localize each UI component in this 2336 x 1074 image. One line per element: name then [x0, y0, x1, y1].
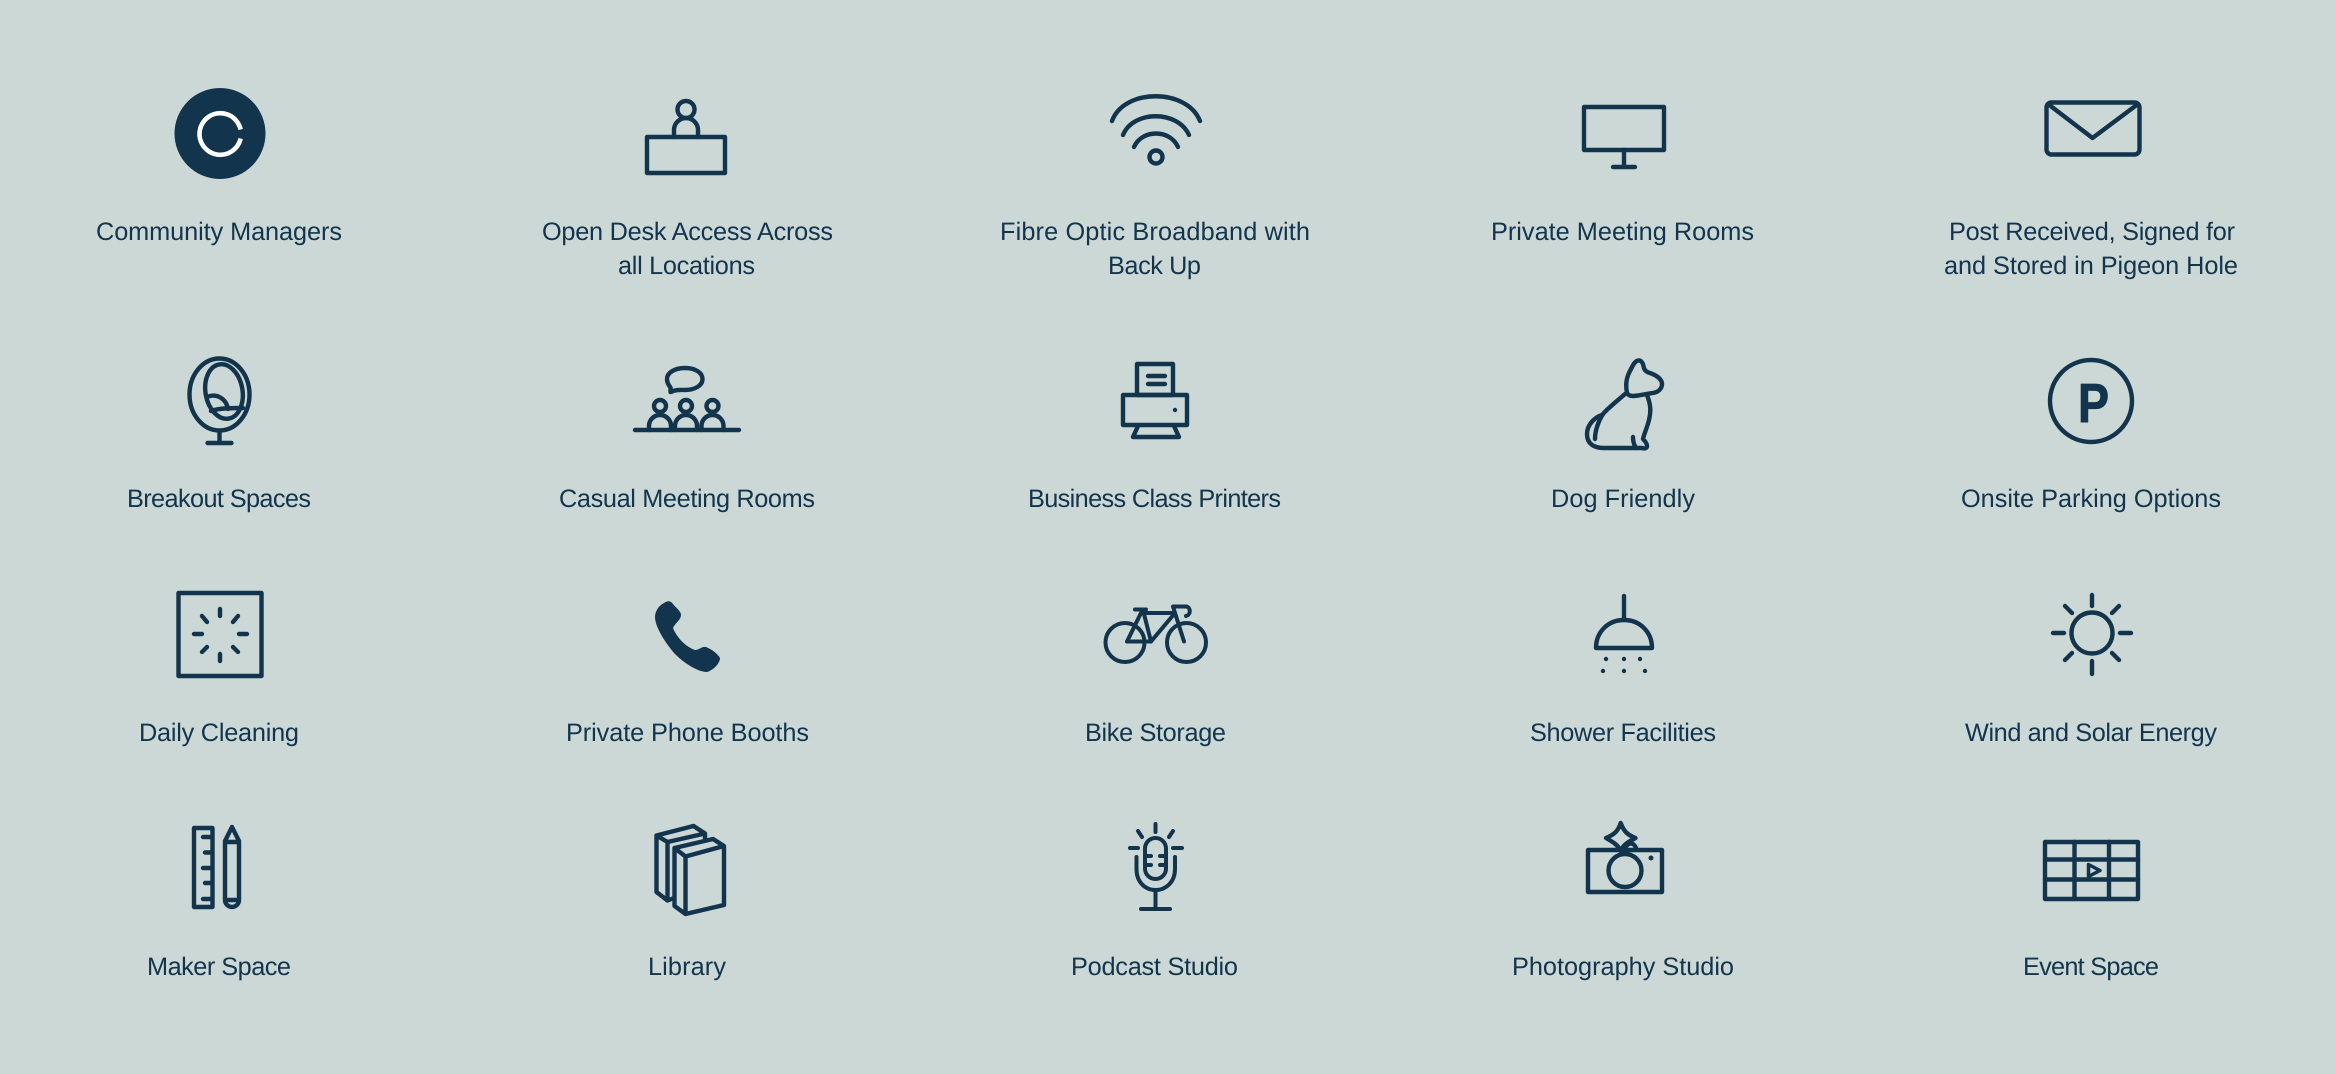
- label: Private Phone Booths: Private Phone Booths: [566, 719, 809, 747]
- icon: screen grid with play button: [2045, 842, 2138, 899]
- item: Private Phone Booths: [566, 601, 809, 747]
- icon: envelope: [2046, 102, 2140, 154]
- label: Post Received: and Stored in Pigeon Hole: [1944, 252, 2238, 280]
- label: Private Meeting Rooms: Private Meeting Rooms: [1491, 218, 1754, 246]
- icon: monitor: [1584, 107, 1664, 167]
- icon: bicycle: [1106, 606, 1206, 662]
- item: Maker Space: [147, 827, 291, 981]
- icon: shower head: [1596, 596, 1652, 648]
- icon: microphone: [1130, 824, 1182, 909]
- label: Daily Cleaning: Daily Cleaning: [139, 719, 299, 747]
- icon: wifi: [1112, 96, 1200, 164]
- item: Community Managers: [96, 88, 342, 246]
- icon: books: [656, 826, 724, 914]
- label: Fibre Optic Broadband: [1000, 218, 1310, 280]
- label: Post Received: [1944, 218, 2238, 280]
- label: Post Received: Post Received, Signed for: [1949, 218, 2235, 246]
- icon: egg chair: [190, 358, 250, 443]
- icon: printer: [1123, 364, 1187, 437]
- icon: community logo: [174, 88, 266, 179]
- icon: parking sign: [2050, 360, 2132, 442]
- item: Podcast Studio: [1071, 824, 1238, 981]
- item: Breakout Spaces: [127, 358, 311, 513]
- label: Wind and Solar Energy: Wind and Solar Energy: [1965, 719, 2217, 747]
- item: Fibre Optic Broadband: [1000, 96, 1310, 280]
- item: Casual Meeting Rooms: [559, 368, 815, 513]
- label: Maker Space: Maker Space: [147, 953, 291, 981]
- item: Onsite Parking Options: [1961, 360, 2221, 513]
- label: Open Desk Access: Open Desk Access Across: [542, 218, 833, 246]
- icon: group with speech bubble: [635, 368, 739, 430]
- item: Business Class Printers: [1028, 364, 1281, 513]
- label: Business Class Printers: Business Class Printers: [1028, 485, 1281, 513]
- item: Private Meeting Rooms: [1491, 107, 1754, 246]
- icon: sun: [2053, 595, 2131, 674]
- label: Community Managers: Community Managers: [96, 218, 342, 246]
- label: Casual Meeting Rooms: Casual Meeting Rooms: [559, 485, 815, 513]
- label: Fibre Optic Broadband: Back Up: [1108, 252, 1201, 280]
- item: Event Space: [2023, 842, 2159, 981]
- label: Photography Studio: Photography Studio: [1512, 953, 1734, 981]
- label: Onsite Parking Options: Onsite Parking Options: [1961, 485, 2221, 513]
- icon: water droplets: [1601, 657, 1647, 673]
- label: Dog Friendly: Dog Friendly: [1551, 485, 1695, 513]
- icon: desk with person: [647, 101, 725, 173]
- label: Fibre Optic Broadband: Fibre Optic Broadband with: [1000, 218, 1310, 246]
- icon: camera with diamond: [1588, 823, 1662, 892]
- item: Dog Friendly: [1551, 360, 1695, 513]
- item: Photography Studio: [1512, 823, 1734, 981]
- item: Wind and Solar Energy: [1965, 595, 2217, 747]
- label: Open Desk Access: all Locations: [618, 252, 755, 280]
- item: Library: [648, 826, 726, 981]
- item: Open Desk Access: [542, 101, 833, 280]
- item: Bike Storage: [1085, 606, 1226, 747]
- label: Open Desk Access: [542, 218, 833, 280]
- label: Shower Facilities: Shower Facilities: [1530, 719, 1716, 747]
- label: Library: Library: [648, 953, 726, 981]
- icon: parking sign: P: [2078, 372, 2109, 434]
- label: Breakout Spaces: Breakout Spaces: [127, 485, 311, 513]
- label: Bike Storage: Bike Storage: [1085, 719, 1226, 747]
- item: Post Received: [1944, 102, 2238, 280]
- label: Podcast Studio: Podcast Studio: [1071, 953, 1238, 981]
- label: Event Space: Event Space: [2023, 953, 2159, 981]
- icon: telephone: [655, 601, 720, 672]
- item: Shower Facilities: [1530, 596, 1716, 747]
- item: Daily Cleaning: [139, 593, 299, 747]
- icon: square with sparkle: [178, 593, 262, 676]
- icon: ruler and pencil: [194, 827, 239, 907]
- icon: sitting dog: [1587, 360, 1662, 448]
